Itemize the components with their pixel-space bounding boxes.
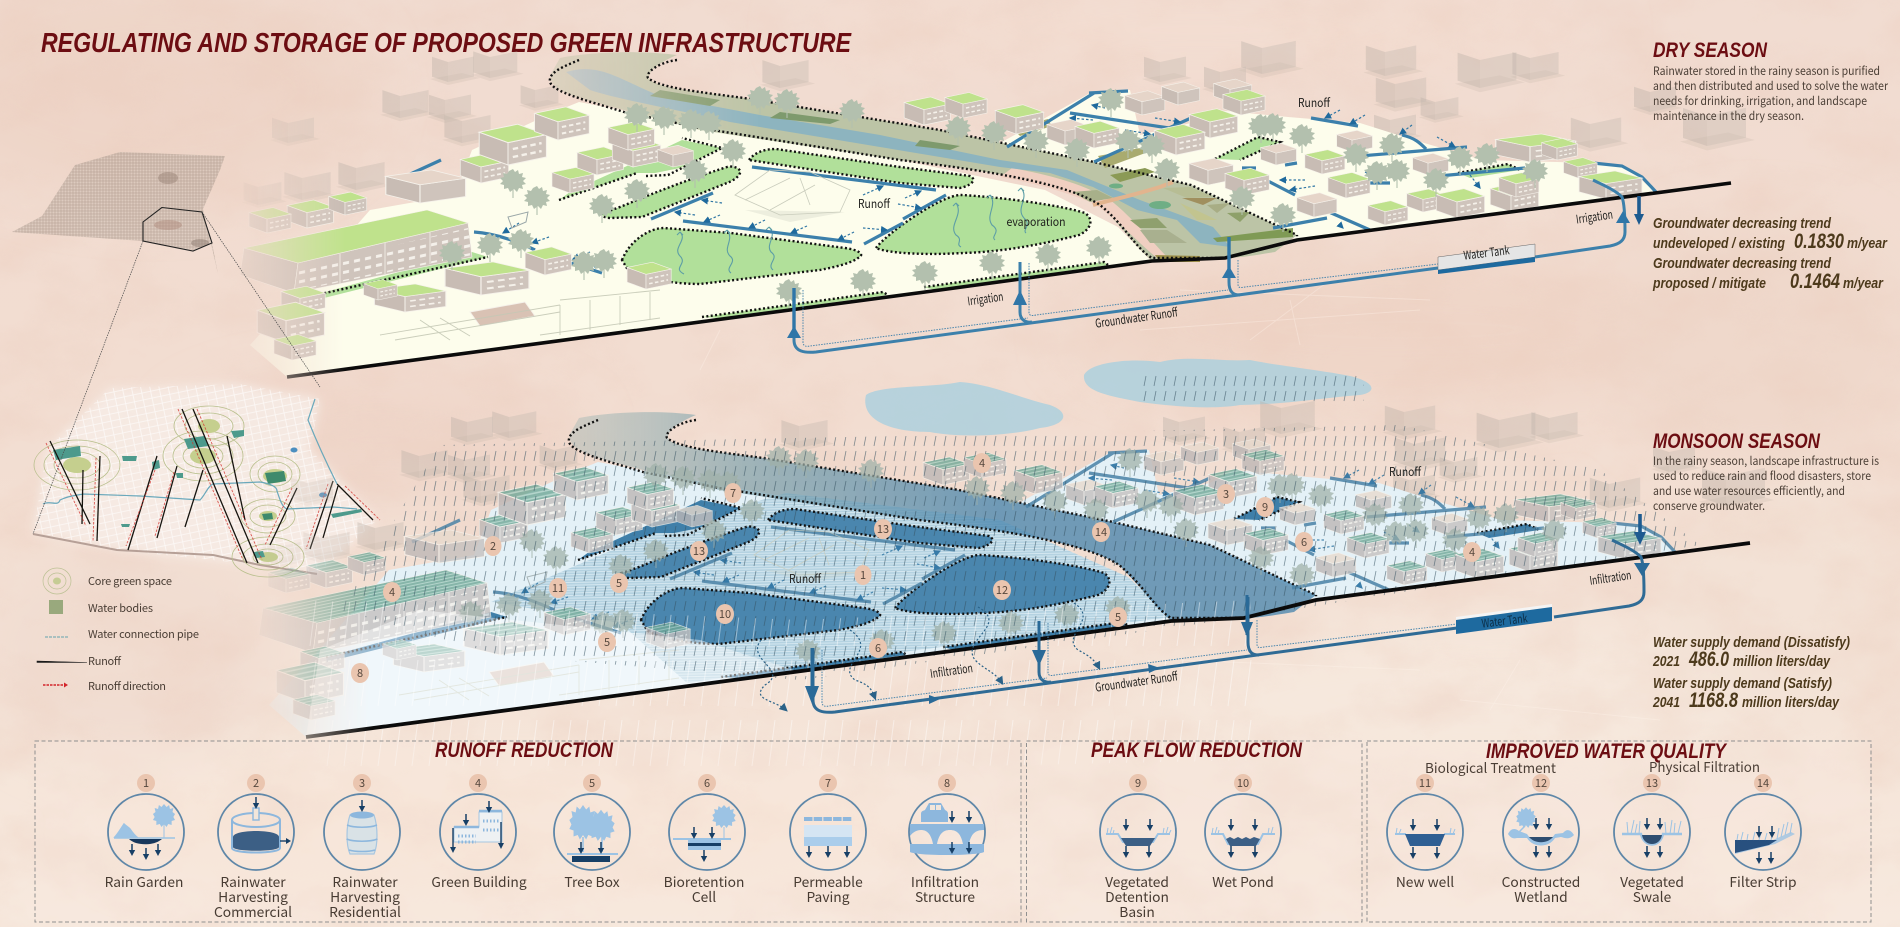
item: residential rainwater harvesting: Residential	[329, 901, 401, 921]
lawns and retention areas	[307, 137, 1520, 318]
rain hatching	[340, 425, 1700, 680]
sub-heading: physical filtration: Physical Filtration	[1649, 756, 1760, 776]
item: permeable paving: 7	[825, 775, 831, 791]
monsoon season statistics	[1652, 634, 1850, 712]
heading: RUNOFF REDUCTION	[435, 739, 614, 762]
map number markers: 9	[1262, 499, 1268, 515]
panel: monsoon season plan	[259, 401, 1774, 780]
item: vegetated detention basin: 9	[1135, 775, 1141, 791]
monsoon season statistics: 486.0	[1688, 648, 1729, 671]
groundwater system	[813, 540, 1644, 712]
monsoon season text: In the rainy season, landscape infrastructure is	[1653, 453, 1879, 469]
legend: Runoff direction	[88, 678, 166, 694]
item: rain garden: 1	[143, 775, 149, 791]
monsoon season text: MONSOON SEASON	[1653, 429, 1820, 453]
monsoon labels: Groundwater Runoff	[1094, 667, 1180, 696]
buildings	[240, 79, 1642, 360]
monsoon season statistics: 2021	[1652, 653, 1680, 670]
item: vegetated detention basin	[1100, 774, 1176, 921]
item: bioretention cell: Cell	[692, 886, 716, 906]
monsoon labels: Infiltration	[1588, 566, 1632, 589]
item: vegetated swale	[1614, 774, 1690, 906]
water tank: Water Tank	[1481, 609, 1529, 632]
surface pipes	[393, 91, 1656, 273]
dry season pipe arrows and water tank	[787, 196, 1644, 338]
item: wet pond	[1205, 774, 1281, 891]
dry season statistics	[1652, 215, 1888, 293]
item: constructed wetland: Constructed	[1502, 871, 1580, 891]
map number markers: 5	[604, 634, 610, 650]
water tank	[1438, 241, 1535, 274]
item: new well	[1387, 774, 1463, 891]
dry season statistics: m/year	[1847, 235, 1888, 252]
map number markers: 5	[616, 575, 622, 591]
map number markers: 6	[875, 640, 881, 656]
map number markers: 7	[730, 485, 736, 501]
item: commercial rainwater harvesting: Rainwater	[220, 871, 286, 891]
item: commercial rainwater harvesting: Commercial	[214, 901, 292, 921]
groundwater system	[794, 180, 1625, 352]
panel: peak flow reduction	[1026, 739, 1362, 922]
dry labels	[858, 94, 1614, 332]
item: infiltration structure: Structure	[915, 886, 975, 906]
item: permeable paving: Paving	[806, 886, 850, 906]
monsoon season statistics: 1168.8	[1689, 689, 1738, 712]
dry season statistics: proposed / mitigate	[1652, 275, 1766, 292]
item: vegetated swale: Swale	[1633, 886, 1672, 906]
map number markers: 13	[877, 521, 889, 537]
panel: dry season plan	[240, 41, 1755, 377]
map number markers: 4	[1469, 544, 1475, 560]
item: bioretention cell	[664, 774, 745, 906]
dry season text: needs for drinking, irrigation, and landscape	[1653, 93, 1867, 109]
item: constructed wetland	[1502, 774, 1580, 906]
monsoon labels: Runoff	[789, 570, 822, 587]
legend	[37, 568, 199, 694]
item: residential rainwater harvesting: Harvesting	[330, 886, 400, 906]
item: rain garden	[105, 774, 184, 891]
monsoon season text: used to reduce rain and flood disasters, store	[1653, 468, 1871, 484]
monsoon season statistics: 2041	[1652, 694, 1680, 711]
item: residential rainwater harvesting: Rainwater	[332, 871, 398, 891]
map number markers: 6	[1301, 534, 1307, 550]
monsoon season statistics: million liters/day	[1733, 653, 1831, 670]
dry season statistics: undeveloped / existing	[1653, 235, 1785, 252]
context buildings	[261, 401, 1774, 568]
rain clouds	[865, 359, 1371, 435]
map number markers: 14	[1095, 524, 1107, 540]
dry labels: Runoff	[1298, 94, 1331, 111]
item: filter strip: Filter Strip	[1729, 871, 1797, 891]
monsoon season statistics: million liters/day	[1742, 694, 1840, 711]
dry labels: Irrigation	[1575, 206, 1614, 228]
corridor: river park	[550, 52, 1297, 262]
item: rain garden: Rain Garden	[105, 871, 183, 891]
flooded corridor	[570, 412, 1316, 621]
item: filter strip: 14	[1757, 775, 1769, 791]
panel: locator maps and legend	[12, 152, 380, 694]
item: green building: Green Building	[431, 871, 527, 891]
buildings	[259, 439, 1661, 720]
item: green building	[431, 774, 527, 891]
water tank: Water Tank	[1463, 241, 1511, 264]
item: infiltration structure	[909, 774, 985, 906]
dry season statistics: Groundwater decreasing trend	[1653, 215, 1832, 232]
rain streaks	[300, 600, 1260, 780]
faint context streets	[700, 280, 1660, 720]
item: commercial rainwater harvesting: 2	[253, 775, 259, 791]
heading: PEAK FLOW REDUCTION	[1091, 739, 1303, 762]
context buildings	[242, 41, 1755, 208]
item: bioretention cell: 6	[704, 775, 710, 791]
map number markers: 13	[693, 543, 705, 559]
trees	[439, 86, 1548, 308]
monsoon labels: Infiltration	[929, 659, 974, 682]
rain wash at south-west	[306, 610, 800, 737]
item: new well: 11	[1419, 775, 1431, 791]
map number markers	[351, 453, 1481, 683]
item: filter strip	[1725, 774, 1801, 891]
item: vegetated detention basin: Vegetated	[1105, 871, 1169, 891]
trees	[458, 446, 1567, 668]
item: vegetated swale: Vegetated	[1620, 871, 1684, 891]
map number markers: 5	[1115, 609, 1121, 625]
baseline	[306, 543, 1750, 737]
dry season text	[1653, 38, 1889, 124]
dry season text: maintenance in the dry season.	[1653, 108, 1804, 124]
title: REGULATING AND STORAGE OF PROPOSED GREEN INFRASTRUCTURE	[41, 27, 852, 58]
legend: Runoff	[88, 653, 122, 669]
item: permeable paving: Permeable	[793, 871, 863, 891]
monsoon season text: conserve groundwater.	[1653, 498, 1765, 514]
item: vegetated detention basin: Detention	[1105, 886, 1169, 906]
dry labels: Irrigation	[966, 288, 1004, 309]
item: constructed wetland: Wetland	[1514, 886, 1568, 906]
item: tree box: 5	[589, 775, 595, 791]
sub-heading: biological treatment: Biological Treatment	[1425, 757, 1556, 777]
flooded ground	[269, 450, 1675, 737]
legend: Water connection pipe	[88, 626, 199, 642]
map number markers: 10	[719, 606, 731, 622]
district map	[33, 384, 380, 577]
dry labels: Groundwater Runoff	[1094, 303, 1180, 332]
flood ponds	[326, 497, 1539, 678]
dry season text: Rainwater stored in the rainy season is purified	[1653, 63, 1880, 79]
dry season statistics: 0.1830	[1794, 230, 1844, 253]
panel: runoff reduction	[35, 739, 1021, 922]
baseline	[287, 183, 1731, 377]
leader lines	[33, 212, 320, 534]
item: vegetated detention basin: Basin	[1119, 901, 1155, 921]
item: constructed wetland: 12	[1535, 775, 1547, 791]
map number markers: 1	[860, 567, 866, 583]
monsoon season text: and use water resources efficiently, and	[1653, 483, 1845, 499]
legend: Core green space	[88, 573, 172, 589]
monsoon season text	[1653, 429, 1879, 514]
map number markers: 12	[996, 582, 1008, 598]
item: bioretention cell: Bioretention	[664, 871, 744, 891]
map number markers: 2	[490, 538, 496, 554]
item: permeable paving	[790, 774, 866, 906]
dry labels: Runoff	[858, 195, 891, 212]
monsoon season statistics: Water supply demand (Satisfy)	[1653, 675, 1832, 692]
item: wet pond: 10	[1237, 775, 1249, 791]
dry season statistics: Groundwater decreasing trend	[1653, 255, 1832, 272]
item: commercial rainwater harvesting: Harvesting	[218, 886, 288, 906]
item: commercial rainwater harvesting	[214, 774, 294, 921]
dry season text: DRY SEASON	[1653, 38, 1767, 62]
monsoon labels: Runoff	[1389, 463, 1422, 480]
drains	[412, 451, 1675, 633]
heading: IMPROVED WATER QUALITY	[1486, 740, 1728, 763]
item: residential rainwater harvesting: 3	[359, 775, 365, 791]
item: green building: 4	[475, 775, 481, 791]
item: vegetated swale: 13	[1646, 775, 1658, 791]
item: wet pond: Wet Pond	[1212, 871, 1274, 891]
map number markers: 4	[979, 455, 985, 471]
ground	[250, 90, 1656, 377]
item: new well: New well	[1396, 871, 1454, 891]
legend: Water bodies	[88, 600, 153, 616]
map number markers: 3	[1223, 486, 1229, 502]
map number markers: 4	[389, 584, 395, 600]
item: infiltration structure: 8	[944, 775, 950, 791]
water tank	[1456, 604, 1552, 634]
item: tree box: Tree Box	[564, 871, 620, 891]
panel: improved water quality	[1367, 740, 1871, 922]
item: infiltration structure: Infiltration	[911, 871, 979, 891]
monsoon labels	[789, 463, 1632, 696]
map number markers: 11	[552, 580, 564, 596]
city map	[12, 152, 225, 274]
monsoon season statistics: Water supply demand (Dissatisfy)	[1653, 634, 1850, 651]
item: tree box	[554, 774, 630, 891]
evaporation lines	[677, 188, 1027, 274]
dry labels: evaporation	[1006, 213, 1066, 230]
dry season statistics: 0.1464	[1790, 270, 1840, 293]
item: residential rainwater harvesting	[324, 774, 401, 921]
map number markers: 8	[357, 665, 363, 681]
monsoon infiltration arrows and water tank	[757, 514, 1650, 710]
dry season statistics: m/year	[1843, 275, 1884, 292]
